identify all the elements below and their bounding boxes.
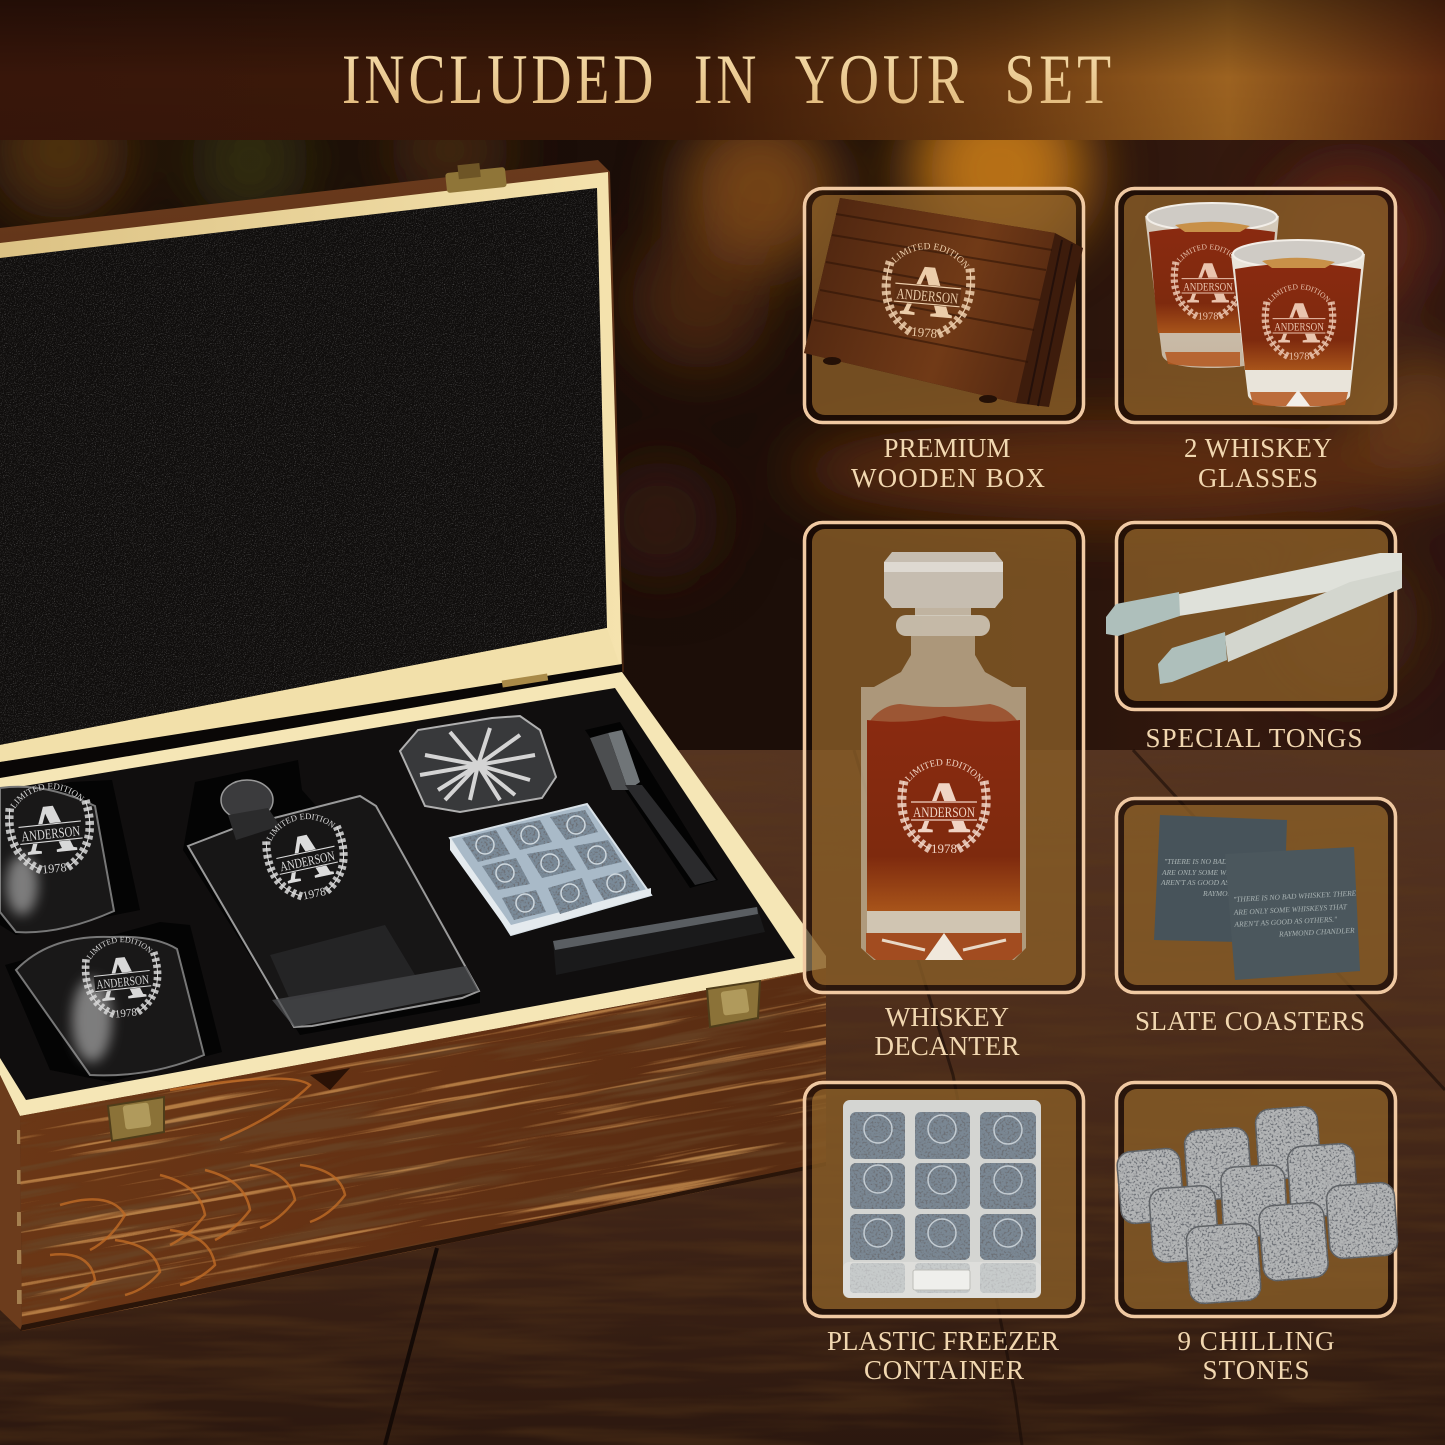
slate coaster back: ARE ONLY SOME WHISKEYS	[1161, 868, 1256, 877]
background wall with bokeh lights	[0, 80, 1445, 760]
label: 2 whiskey glasses: 2 WHISKEY	[1184, 433, 1332, 463]
slate coaster back	[1154, 815, 1287, 943]
engraved crest: ANDERSON	[21, 823, 81, 845]
engraved crest	[1262, 284, 1336, 362]
engraved crest: LIMITED EDITION	[891, 243, 970, 268]
engraved crest: ANDERSON	[96, 972, 150, 992]
decanter crest: ANDERSON	[913, 805, 975, 821]
box lid	[0, 160, 624, 780]
stones photo	[1116, 1106, 1398, 1304]
engraved crest: 1978	[301, 885, 327, 903]
engraved crest	[5, 783, 94, 877]
engraved crest: A	[898, 249, 958, 335]
engraved crest: ANDERSON	[1183, 280, 1233, 294]
engraved crest: A	[1187, 250, 1230, 316]
engraved crest: LIMITED EDITION	[10, 783, 84, 809]
label: whiskey decanter: WHISKEY	[885, 1002, 1009, 1032]
label: premium wooden box: WOODEN BOX	[851, 463, 1046, 493]
engraved crest: 1978	[114, 1006, 138, 1021]
slate coaster front: ARE ONLY SOME WHISKEYS THAT	[1233, 902, 1348, 917]
brass latch left	[108, 1097, 164, 1141]
panel: premium wooden box	[802, 186, 1086, 424]
engraved crest	[882, 243, 976, 341]
engraved crest: LIMITED EDITION	[1268, 284, 1330, 303]
panel: 9 chilling stones	[1116, 1082, 1398, 1316]
label: 9 chilling stones: STONES	[1202, 1355, 1310, 1385]
slate coaster back: AREN'T AS GOOD AS	[1160, 878, 1229, 887]
slate coaster front: "THERE IS NO BAD WHISKEY. THERE	[1233, 888, 1357, 904]
engraved crest	[262, 813, 348, 903]
engraved crest: A	[275, 817, 338, 898]
engraved crest: ANDERSON	[1274, 320, 1324, 334]
panel: plastic freezer container	[804, 1082, 1084, 1316]
label: slate coasters: SLATE COASTERS	[1135, 1006, 1365, 1036]
engraved crest: A	[1278, 290, 1321, 356]
slate coaster front: RAYMOND CHANDLER	[1278, 926, 1355, 939]
engraved crest: 1978	[1289, 351, 1309, 362]
engraved crest: ANDERSON	[896, 286, 959, 308]
label: special tongs: SPECIAL TONGS	[1146, 723, 1362, 753]
engraved crest: LIMITED EDITION	[266, 813, 336, 842]
engraved crest: 1978	[41, 860, 67, 877]
open wooden gift box	[0, 160, 826, 1331]
wooden box photo	[804, 198, 1083, 407]
engraved crest: 1978	[911, 324, 938, 341]
engraved crest: ANDERSON	[278, 848, 336, 874]
decanter photo	[861, 552, 1026, 960]
engraved crest: LIMITED EDITION	[86, 936, 153, 960]
decanter crest: A	[917, 767, 971, 849]
engraved crest: 1978	[1198, 311, 1218, 322]
container photo	[843, 1100, 1041, 1298]
decanter crest: LIMITED EDITION	[904, 759, 984, 782]
decanter crest: 1978	[931, 841, 957, 856]
engraved crest: A	[96, 941, 148, 1015]
glass in foam, upper	[0, 780, 140, 935]
box side with dovetails	[0, 1075, 31, 1331]
label: plastic freezer container: CONTAINER	[864, 1355, 1024, 1385]
crystal stopper	[400, 716, 556, 812]
stones tray in foam	[450, 804, 651, 935]
glass in foam, lower	[5, 922, 222, 1082]
brass latch right	[707, 981, 760, 1027]
slate coaster front	[1225, 847, 1360, 980]
decanter in foam	[183, 760, 480, 1035]
top banner	[0, 0, 1445, 140]
label: 9 chilling stones: 9 CHILLING	[1178, 1326, 1334, 1356]
glass front	[1231, 239, 1365, 407]
panel: 2 whiskey glasses	[1114, 186, 1398, 424]
wooden table	[0, 750, 1445, 1445]
panel: slate coasters	[1116, 798, 1396, 992]
box base interior	[0, 672, 826, 1116]
box front wood	[20, 968, 826, 1331]
label: premium wooden box: PREMIUM	[884, 433, 1010, 463]
label: whiskey decanter: DECANTER	[874, 1031, 1020, 1061]
glass back	[1145, 202, 1279, 368]
label: 2 whiskey glasses: GLASSES	[1198, 463, 1318, 493]
engraved crest: LIMITED EDITION	[1176, 244, 1232, 263]
lid hinge	[445, 163, 507, 193]
title: INCLUDED IN YOUR SET	[342, 41, 1115, 119]
engraved crest	[82, 936, 162, 1021]
tongs photo	[1106, 553, 1402, 684]
slate coaster back: RAYMOND	[1202, 889, 1239, 898]
engraved crest: A	[21, 788, 80, 871]
panel: whiskey decanter	[802, 520, 1086, 994]
slate coaster front: AREN'T AS GOOD AS OTHERS."	[1233, 914, 1338, 929]
engraved crest	[1170, 244, 1238, 322]
label: plastic freezer container: PLASTIC FREEZER	[827, 1326, 1059, 1356]
slate coaster back: "THERE IS NO BAD WHISKEY.	[1164, 857, 1262, 866]
coasters in foam	[553, 907, 765, 975]
tongs in foam	[585, 722, 718, 888]
decanter crest	[897, 759, 991, 856]
panel: special tongs	[1106, 522, 1402, 710]
